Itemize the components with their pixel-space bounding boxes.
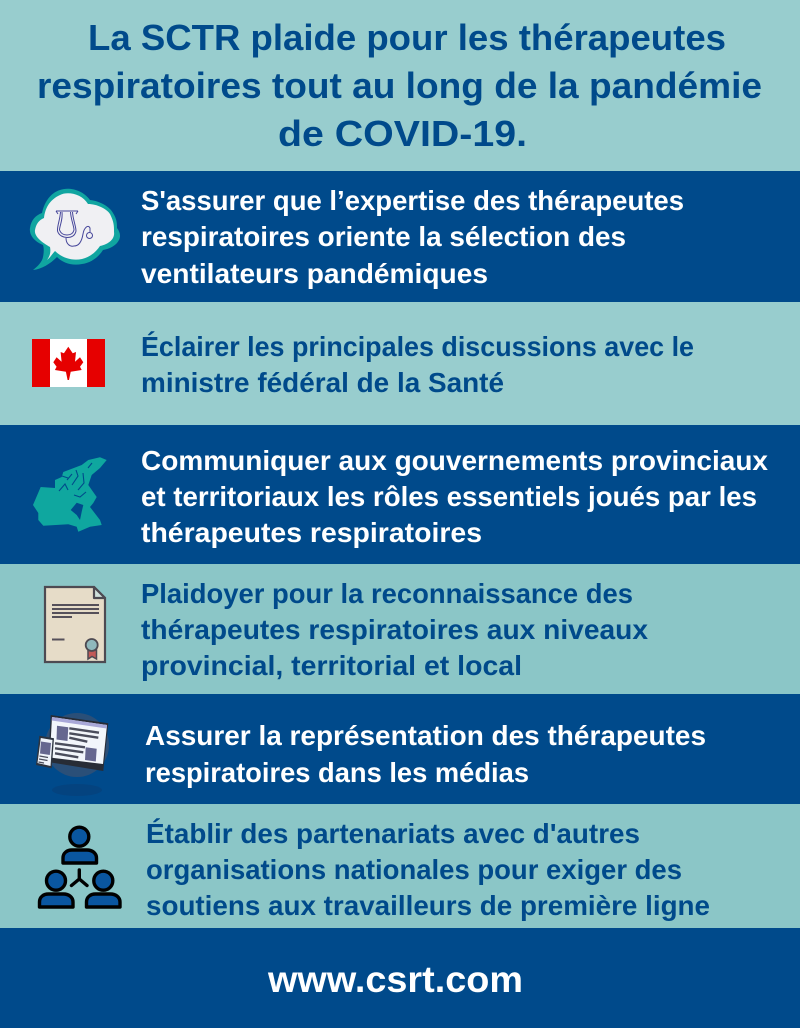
panel: federal minister (0, 302, 800, 425)
text: federal minister: Éclairer les principales discussions avec le (141, 331, 694, 362)
panel: media (0, 694, 800, 804)
text: provinces and territories (141, 445, 769, 548)
icon: speech cloud with stethoscope (30, 189, 120, 270)
panel: partnerships (0, 804, 800, 928)
text: ventilators: respiratoires oriente la sélection des (141, 221, 626, 252)
text: recognition: thérapeutes respiratoires aux niveaux (141, 614, 649, 645)
panel: ventilators (0, 171, 800, 302)
text: provinces and territories: thérapeutes respiratoires (141, 517, 482, 548)
panel: recognition (0, 564, 800, 694)
icon: map of Canada (33, 457, 107, 532)
panel: header (0, 0, 800, 171)
text: partnerships (146, 818, 710, 921)
title (37, 17, 762, 154)
text: ventilators: S'assurer que l’expertise des thérapeutes (141, 185, 684, 216)
icon: certificate (45, 587, 105, 662)
text: recognition: Plaidoyer pour la reconnaissance des (141, 578, 633, 609)
website address: www.csrt.com (267, 959, 523, 1000)
text: ventilators: ventilateurs pandémiques (141, 258, 488, 289)
icon: network of people (40, 827, 120, 907)
icon: Canadian flag (32, 339, 105, 387)
text: media: respiratoires dans les médias (145, 757, 529, 788)
text: recognition (141, 578, 649, 681)
text: media: Assurer la représentation des thérapeutes (145, 720, 706, 751)
text: ventilators (141, 185, 684, 289)
text: federal minister: ministre fédéral de la Santé (141, 367, 504, 398)
text: partnerships: Établir des partenariats avec d'autres (146, 818, 640, 849)
text: recognition: provincial, territorial et local (141, 650, 522, 681)
text: media (145, 720, 706, 788)
text: provinces and territories: et territoriaux les rôles essentiels joués par les (141, 481, 757, 512)
icon: monitor and phone (36, 713, 109, 796)
text: provinces and territories: Communiquer aux gouvernements provinciaux (141, 445, 769, 476)
panel: provinces and territories (0, 425, 800, 564)
text: federal minister (141, 331, 694, 398)
title: respiratoires tout au long de la pandémie (37, 65, 762, 106)
title: La SCTR plaide pour les thérapeutes (88, 17, 726, 58)
text: partnerships: soutiens aux travailleurs de première ligne (146, 890, 710, 921)
text: partnerships: organisations nationales pour exiger des (146, 854, 682, 885)
title: de COVID-19. (278, 113, 527, 154)
panel: footer (0, 928, 800, 1028)
